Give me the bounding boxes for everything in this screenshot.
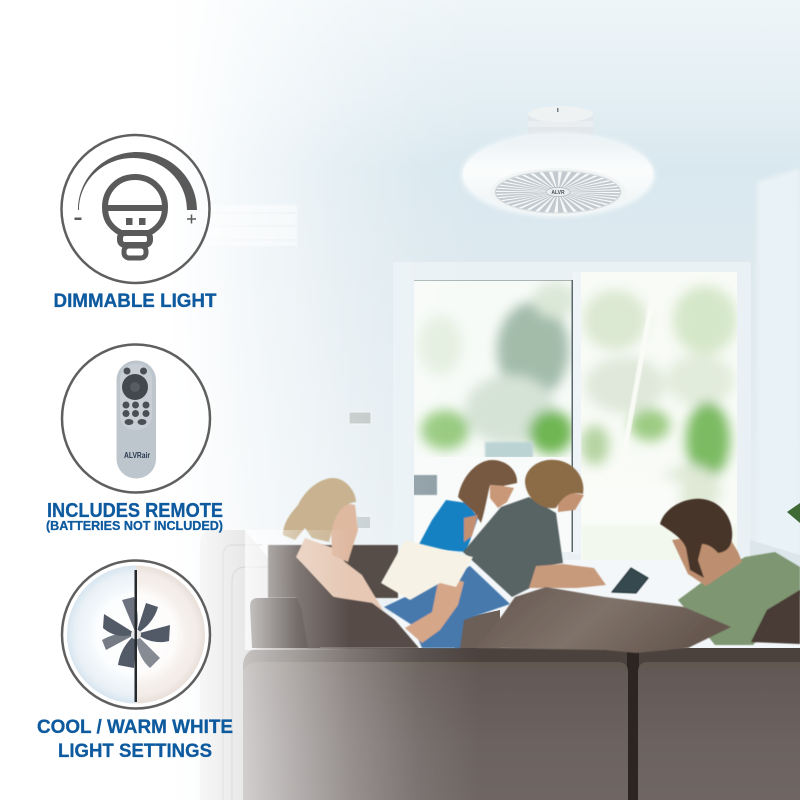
feature: dimmable light — [54, 135, 217, 312]
sofa arm — [200, 530, 270, 800]
seat under jeans — [455, 610, 500, 648]
soft fade over pillow and sofa — [245, 530, 350, 650]
window left pane — [413, 279, 577, 552]
fan grill — [490, 168, 626, 216]
air conditioner — [205, 205, 297, 246]
remote buttons — [122, 368, 150, 425]
fan glow — [461, 133, 655, 217]
fan blades — [102, 597, 170, 668]
outer ring — [62, 560, 210, 708]
right pillow — [751, 590, 800, 644]
fan mount — [528, 106, 593, 135]
face — [330, 500, 358, 562]
plus sign — [187, 214, 196, 224]
floor behind sofa — [393, 560, 800, 655]
chain link fence — [485, 442, 533, 458]
label: batteries not included: (BATTERIES NOT INCLUDED) — [46, 519, 223, 533]
label: dimmable light: DIMMABLE LIGHT — [54, 290, 217, 312]
dimmer arc — [78, 152, 197, 210]
sofa left cushion — [243, 662, 628, 800]
remote logo: ALVRair — [124, 451, 150, 460]
fan ring — [463, 135, 653, 213]
dark sofa seat back — [250, 598, 320, 648]
woman reading — [283, 478, 510, 648]
sofa gap — [627, 650, 639, 800]
bulb — [105, 177, 165, 258]
feature: includes remote — [46, 344, 223, 533]
boy arm — [529, 564, 606, 588]
icon: remote control — [62, 344, 210, 492]
forearm and hand — [405, 578, 464, 643]
wall socket — [357, 517, 370, 528]
back sofa section — [268, 545, 398, 598]
book — [381, 540, 473, 600]
left white fade — [0, 0, 480, 800]
divider line — [134, 570, 137, 702]
hair — [283, 478, 356, 542]
boy in grey shirt — [463, 460, 648, 597]
window divider — [572, 272, 581, 554]
ceiling fan — [461, 106, 655, 217]
window frame — [393, 262, 751, 562]
label: cool / warm white: COOL / WARM WHITE — [37, 716, 233, 738]
tablet — [612, 568, 648, 593]
label: includes remote: INCLUDES REMOTE — [47, 500, 223, 522]
sofa back band — [243, 648, 800, 680]
man in green shirt — [660, 499, 800, 645]
sofa front — [200, 530, 800, 800]
plant — [787, 503, 800, 523]
centre pillow — [477, 587, 731, 653]
room background photo — [221, 0, 800, 648]
feature: cool / warm white light — [37, 560, 233, 762]
icon: cool and warm fan — [62, 560, 210, 708]
fan logo: ALVR — [551, 190, 565, 196]
right side wall — [757, 168, 800, 560]
sofa pillow behind woman — [270, 545, 419, 648]
label: light settings: LIGHT SETTINGS — [58, 740, 212, 762]
minus sign — [74, 218, 82, 220]
remote dial — [122, 374, 148, 400]
family on sofa — [245, 460, 800, 653]
sofa right cushion — [638, 662, 800, 800]
wall switch — [349, 412, 371, 424]
icon: dimmable bulb — [62, 135, 210, 283]
girl in blue top — [417, 460, 517, 552]
window right pane — [581, 272, 737, 562]
back and arm — [296, 538, 383, 610]
jeans — [384, 566, 510, 648]
